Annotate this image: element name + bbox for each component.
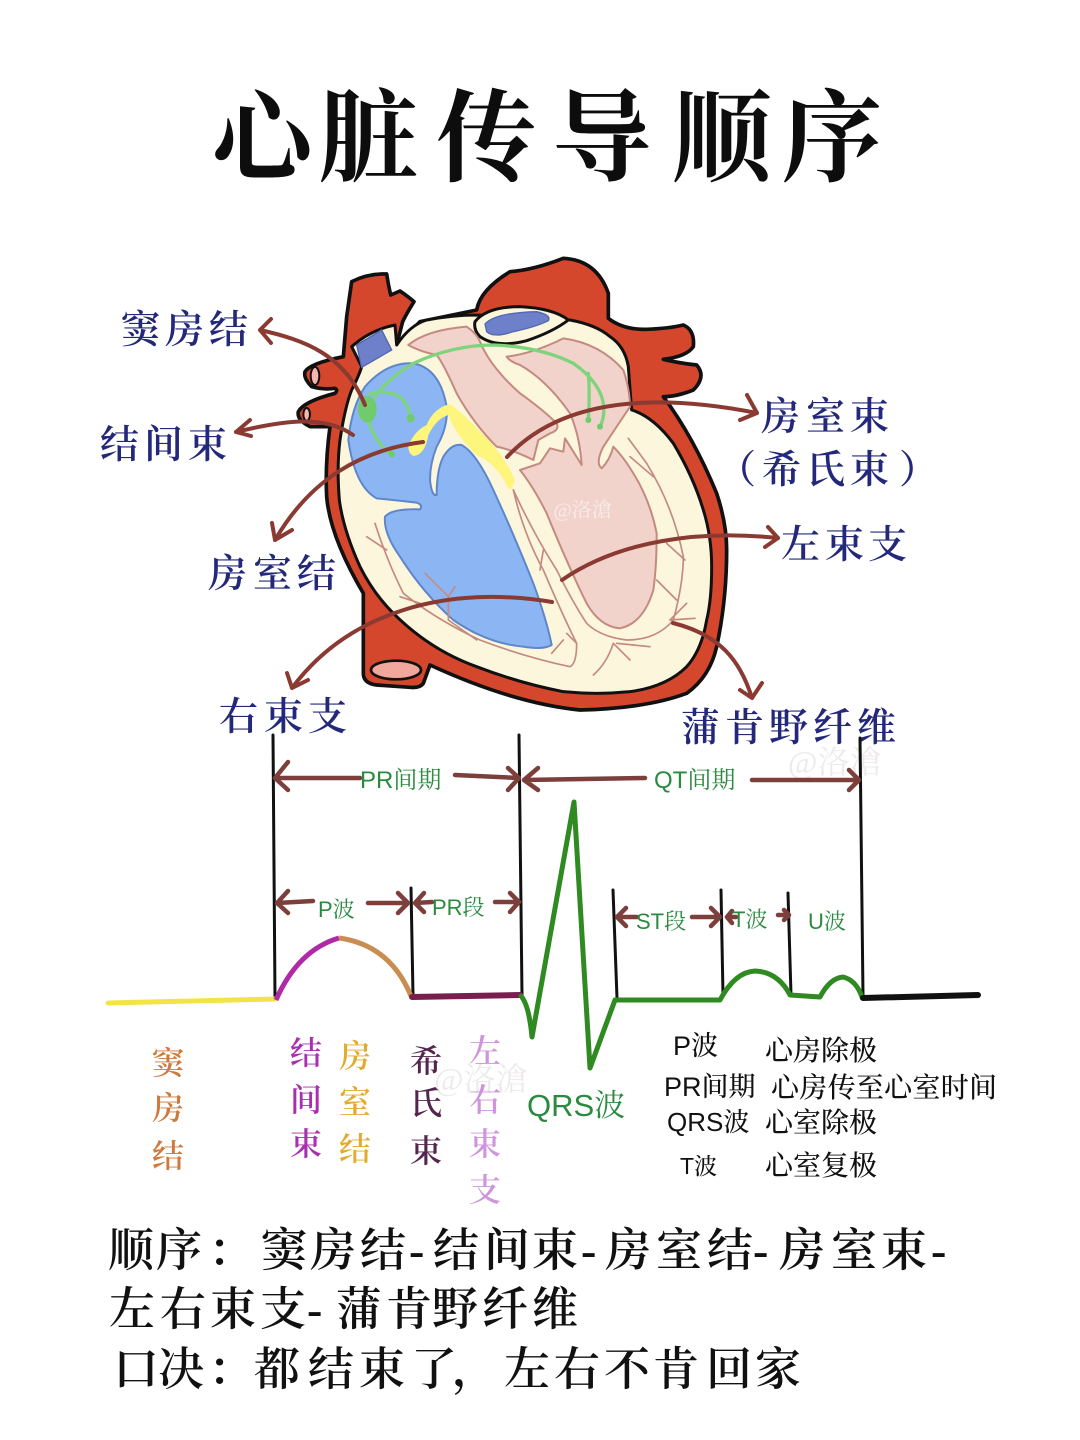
label: 希氏束: （希氏束） (717, 449, 938, 492)
watermark in heart: @洛滄 (553, 499, 612, 522)
ECG trace: P wave rising (276, 938, 339, 1000)
vertical label: 窦房结: 窦房结 (152, 1045, 184, 1174)
legend table: 心房除极 (765, 1034, 877, 1066)
sequence and mnemonic text (108, 1225, 946, 1396)
label: 房室束: 房室束 (761, 396, 889, 439)
vessel openings (303, 367, 421, 679)
vertical label: 结间束: 结间束 (290, 1035, 322, 1162)
left ventricle (507, 338, 657, 628)
heart outer wall and great vessels (298, 258, 727, 710)
arrow: 房室结 (272, 442, 423, 540)
arrow: 窦房结 (260, 319, 365, 405)
P wave label: P波 (318, 897, 355, 922)
atrioventricular node and bundle in yellow (408, 404, 515, 489)
internodal tract in green (358, 345, 604, 457)
ST and T arrows (617, 908, 789, 926)
label: 窦房结: 窦房结 (121, 309, 248, 352)
arrow: 结间束 (236, 420, 353, 436)
interval boundary lines (273, 735, 863, 998)
legend table: QRS波 (667, 1107, 749, 1137)
arrow: 右束支 (287, 597, 552, 688)
PR segment label: PR段 (432, 895, 485, 920)
arrow: 房室束 (507, 395, 757, 457)
ECG diagram (108, 735, 978, 1068)
arrow: 蒲肯野纤维 (673, 623, 762, 698)
label: 左束支: 左束支 (781, 524, 907, 567)
legend table (664, 1031, 997, 1181)
QT interval label: QT间期 (654, 767, 735, 794)
ECG trace: PR segment (412, 995, 520, 997)
Purkinje fibre network (367, 438, 695, 675)
U wave label: U波 (808, 909, 846, 934)
ECG trace: baseline yellow (108, 999, 275, 1003)
vertical label: 左右束支: 左右束支 (469, 1033, 501, 1208)
sequence line 2: 左右束支-蒲肯野纤维 (109, 1284, 578, 1335)
right atrium and ventricle (348, 363, 552, 648)
watermark: @洛滄 (788, 744, 881, 780)
ECG trace: P wave falling (339, 938, 411, 996)
legend table: 心室除极 (765, 1106, 877, 1138)
legend table: P波 (673, 1031, 718, 1061)
legend table: T波 (680, 1153, 717, 1179)
sequence line 1: 顺序：窦房结-结间束-房室结-房室束- (108, 1225, 946, 1276)
mnemonic line: 口决：都结束了，左右不肯回家 (113, 1344, 801, 1396)
arrow: 左束支 (562, 527, 778, 580)
P wave and PR segment arrows (277, 891, 519, 913)
label: 结间束: 结间束 (100, 424, 227, 467)
legend table: PR间期 (664, 1072, 756, 1102)
QT interval arrows (524, 768, 859, 790)
QRS wave label: QRS波 (527, 1088, 625, 1123)
PR interval label: PR间期 (360, 767, 441, 794)
ECG trace: end baseline (863, 995, 978, 998)
title: 心脏传导顺序 (212, 84, 882, 195)
legend table: 心房传至心室时间 (771, 1072, 997, 1103)
superior vena cava patch (357, 330, 392, 367)
pulmonary artery section (475, 307, 568, 344)
PR interval arrows (275, 762, 519, 790)
heart cream interior (338, 315, 712, 693)
watermark: @洛滄 (434, 1061, 527, 1097)
left atrium (408, 327, 557, 460)
label: 蒲肯野纤维: 蒲肯野纤维 (681, 707, 896, 750)
legend table: 心室复极 (765, 1149, 877, 1181)
vertical label: 希氏束: 希氏束 (410, 1043, 442, 1169)
vertical label: 房室结: 房室结 (339, 1038, 371, 1167)
heart diagram (298, 258, 727, 710)
ST segment label: ST段 (636, 909, 686, 934)
ECG trace: QRS, ST, T and U (521, 802, 862, 1068)
label: 房室结: 房室结 (208, 553, 336, 596)
T wave label: T波 (732, 907, 767, 932)
label: 右束支: 右束支 (219, 696, 347, 739)
